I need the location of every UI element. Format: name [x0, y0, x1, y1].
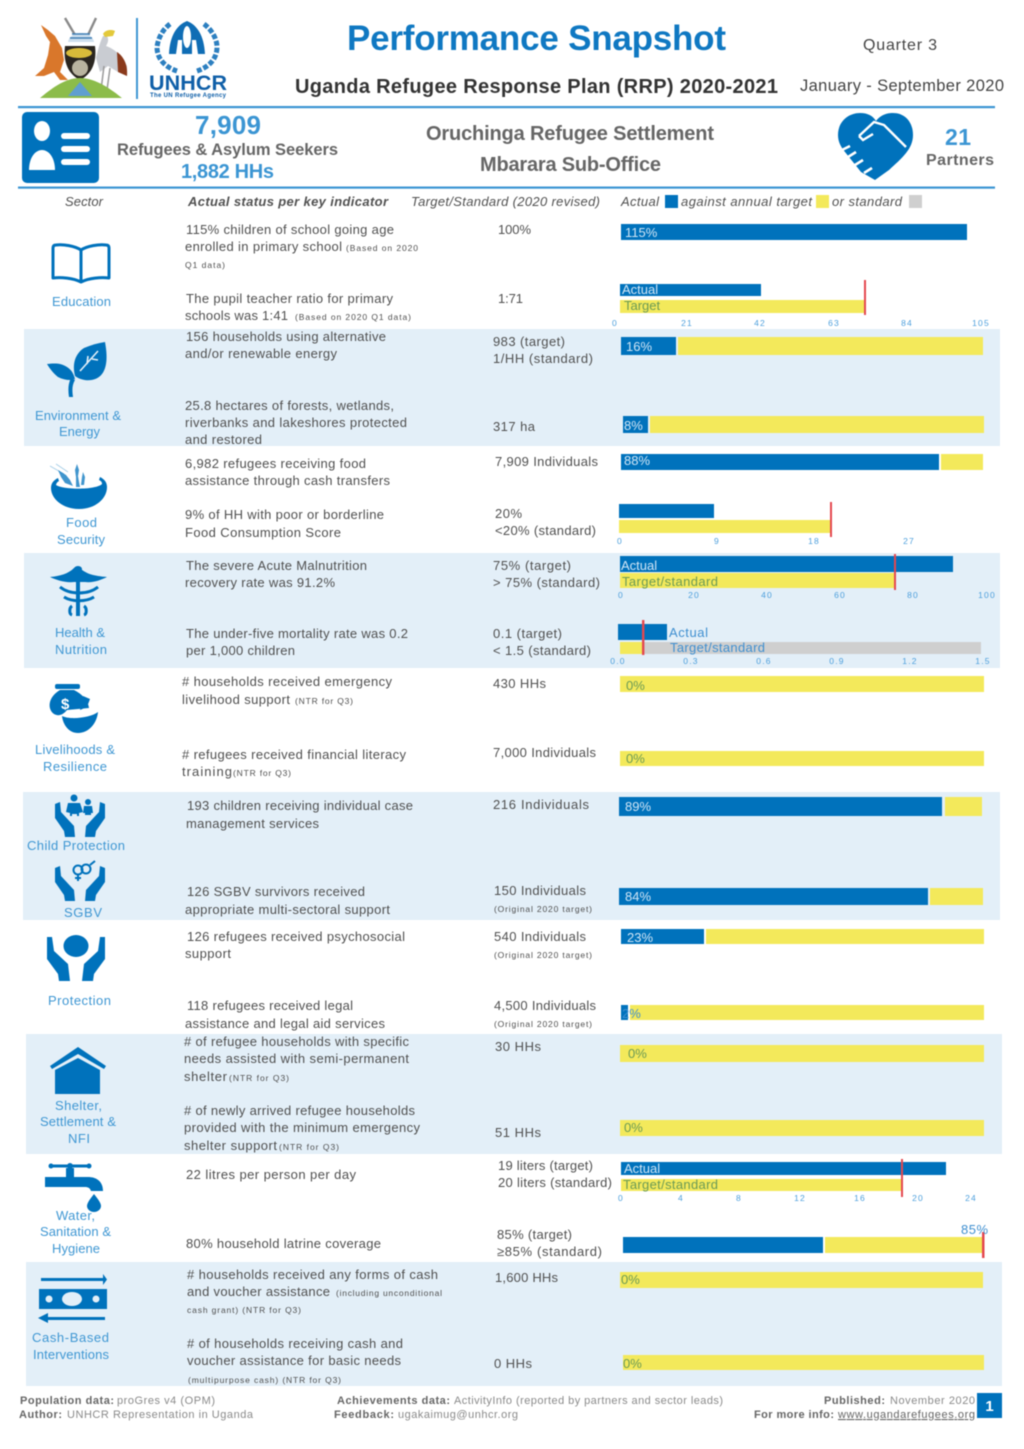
- indicator: litres per day: 4: [678, 1193, 684, 1203]
- indicator: under-five mortality: 0.1 (target): [493, 626, 562, 641]
- more info: [754, 1409, 975, 1421]
- indicator: latrine coverage: 85% (target): [497, 1227, 572, 1242]
- indicator: financial literacy: # refugees received financial literacy: [182, 747, 406, 762]
- sector label: NFI: [68, 1131, 90, 1146]
- indicator: emergency livelihood: 0%: [626, 678, 645, 693]
- indicator: food consumption score: 9: [714, 536, 720, 546]
- indicator: litres per day: 12: [794, 1193, 806, 1203]
- icon: money bag and bowl: $: [61, 696, 70, 713]
- logo: UNHCR: The UN Refugee Agency: [150, 93, 227, 99]
- population label: Refugees & Asylum Seekers: [117, 141, 338, 159]
- indicator: emergency livelihood: (NTR for Q3): [295, 696, 353, 706]
- panel: Livelihoods & Resilience: [35, 674, 984, 779]
- legend: against annual target: [681, 194, 813, 209]
- icon: caduceus: [50, 566, 107, 616]
- indicator: hectares protected: [185, 398, 984, 447]
- indicator: school enrolment: 100%: [498, 222, 531, 237]
- indicator: legal assistance: 2%: [622, 1006, 641, 1021]
- indicator: SAM recovery: Actual: [621, 558, 657, 573]
- indicator: SGBV survivors: [185, 883, 983, 917]
- achievements source: [337, 1395, 723, 1407]
- footer: [19, 1393, 1002, 1421]
- population figure: 7,909: [195, 110, 261, 140]
- indicator: semi-permanent shelter: 30 HHs: [495, 1039, 542, 1054]
- indicator: hectares protected: 8%: [624, 418, 643, 433]
- indicator: pupil teacher ratio: 84: [901, 318, 913, 328]
- sector label: Cash-Based: [32, 1330, 109, 1345]
- header rule top: [18, 106, 995, 108]
- indicator: pupil teacher ratio: schools was 1:41: [185, 308, 288, 323]
- panel: Environment & Energy: [24, 329, 1000, 447]
- indicator: child case management: 216 Individuals: [493, 797, 590, 812]
- sector label: [40, 1208, 111, 1256]
- indicator: pupil teacher ratio: 0: [612, 318, 618, 328]
- indicator: multipurpose cash: # of households receiving cash and: [187, 1336, 403, 1351]
- indicator: multipurpose cash: 0%: [623, 1356, 642, 1371]
- indicator: pupil teacher ratio: 105: [972, 318, 990, 328]
- indicator: cash and voucher: 0%: [621, 1272, 640, 1287]
- indicator: school enrolment: 115% children of school going age: [186, 222, 394, 237]
- households figure: 1,882 HHs: [181, 161, 274, 183]
- indicator: cash and voucher: (including unconditional: [336, 1288, 442, 1298]
- panel: Cash-Based Interventions: [26, 1262, 1002, 1386]
- indicator: emergency shelter: [184, 1103, 984, 1153]
- indicator: renewable energy: and/or renewable energy: [185, 346, 338, 361]
- indicator: food consumption score: <20% (standard): [495, 523, 596, 538]
- indicator: SGBV survivors: 84%: [625, 889, 651, 904]
- icon: hands with children: [55, 794, 105, 837]
- indicator: litres per day: 16: [854, 1193, 866, 1203]
- indicator: semi-permanent shelter: shelter: [184, 1069, 228, 1084]
- panel: Health & Nutrition: [24, 553, 1000, 668]
- indicator: multipurpose cash: voucher assistance for basic needs: [187, 1353, 402, 1368]
- indicator: emergency shelter: 51 HHs: [495, 1125, 542, 1140]
- header rule bottom: [18, 186, 995, 189]
- indicator: legal assistance: 4,500 Individuals: [494, 998, 596, 1013]
- indicator: pupil teacher ratio: 42: [754, 318, 766, 328]
- indicator: litres per day: 20: [912, 1193, 924, 1203]
- sector label: [32, 1330, 110, 1362]
- indicator: school enrolment: [185, 222, 967, 270]
- header: [35, 18, 1004, 99]
- page number: 1: [985, 1398, 994, 1415]
- indicator: SAM recovery: 20: [688, 590, 700, 600]
- indicator: semi-permanent shelter: needs assisted with semi-permanent: [184, 1051, 409, 1066]
- indicator: school enrolment: Q1 data): [185, 260, 225, 270]
- logo divider: [136, 18, 138, 99]
- sector label: Energy: [59, 424, 100, 439]
- indicator: litres per day: 20 liters (standard): [498, 1175, 612, 1190]
- icon: banknote with arrows: [38, 1274, 107, 1323]
- indicator: under-five mortality: 1.2: [902, 656, 918, 666]
- indicator: pupil teacher ratio: 21: [681, 318, 693, 328]
- indicator: food cash transfers: 7,909 Individuals: [495, 454, 598, 469]
- indicator: emergency livelihood: 430 HHs: [493, 676, 546, 691]
- sector label: Settlement &: [40, 1114, 116, 1129]
- legend: or standard: [832, 194, 903, 209]
- panel: Protection: [47, 929, 984, 1031]
- indicator: emergency livelihood: livelihood support: [182, 692, 290, 707]
- indicator: food consumption score: 20%: [495, 506, 522, 521]
- indicator: emergency shelter: 0%: [624, 1120, 643, 1135]
- indicator: litres per day: Target/standard: [623, 1177, 718, 1192]
- indicator: SGBV survivors: (Original 2020 target): [494, 904, 592, 914]
- indicator: litres per day: [186, 1158, 977, 1203]
- indicator: school enrolment: 115%: [625, 225, 658, 240]
- indicator: litres per day: 19 liters (target): [498, 1158, 593, 1173]
- indicator: school enrolment: enrolled in primary school: [185, 239, 342, 254]
- population source: Population data:: [20, 1395, 114, 1407]
- indicator: food consumption score: 9% of HH with poor or borderline: [185, 507, 384, 522]
- indicator: SAM recovery: 0: [618, 590, 624, 600]
- sector label: Child Protection: [27, 838, 125, 853]
- indicator: food consumption score: [185, 502, 915, 546]
- column: sector: Sector: [65, 194, 104, 209]
- indicator: food consumption score: 27: [903, 536, 915, 546]
- indicator: pupil teacher ratio: 63: [828, 318, 840, 328]
- published: November 2020: [890, 1395, 975, 1407]
- indicator: SAM recovery: 75% (target): [493, 558, 571, 573]
- indicator: financial literacy: training: [182, 764, 232, 779]
- indicator: multipurpose cash: 0 HHs: [494, 1356, 532, 1371]
- population source: [20, 1395, 215, 1407]
- panel: Water, Sanitation & Hygiene: [40, 1158, 988, 1259]
- sector label: Interventions: [33, 1347, 110, 1362]
- summary band: [22, 110, 994, 183]
- icon: book: [53, 245, 109, 282]
- indicator: pupil teacher ratio: Actual: [622, 282, 658, 297]
- indicator: semi-permanent shelter: (NTR for Q3): [229, 1073, 289, 1083]
- indicator: financial literacy: (NTR for Q3): [233, 768, 291, 778]
- legend: [620, 194, 922, 209]
- indicator: hectares protected: 317 ha: [493, 419, 536, 434]
- subtitle: Uganda Refugee Response Plan (RRP) 2020-2021: [295, 76, 778, 98]
- indicator: financial literacy: [182, 745, 984, 779]
- panel: Shelter, Settlement & NFI: [26, 1034, 1002, 1154]
- indicator: SAM recovery: 60: [834, 590, 846, 600]
- indicator: latrine coverage: [186, 1222, 988, 1259]
- indicator: psychosocial support: 23%: [627, 930, 653, 945]
- indicator: SGBV survivors: appropriate multi-sectoral support: [185, 902, 390, 917]
- achievements source: ActivityInfo (reported by partners and sector leads): [454, 1395, 723, 1407]
- icon: house: [50, 1047, 106, 1094]
- sector label: Sanitation &: [40, 1224, 111, 1239]
- sector label: Environment &: [35, 408, 121, 423]
- indicator: pupil teacher ratio: [185, 280, 990, 328]
- indicator: renewable energy: 16%: [626, 339, 652, 354]
- sector label: [40, 1098, 116, 1146]
- indicator: school enrolment: (Based on 2020: [346, 243, 418, 253]
- logo: UNHCR: [149, 21, 227, 99]
- indicator: pupil teacher ratio: The pupil teacher ratio for primary: [186, 291, 394, 306]
- author: Author:: [19, 1409, 62, 1421]
- indicator: litres per day: 0: [618, 1193, 624, 1203]
- indicator: SAM recovery: The severe Acute Malnutrition: [186, 558, 367, 573]
- indicator: multipurpose cash: [187, 1336, 984, 1385]
- indicator: latrine coverage: 80% household latrine coverage: [186, 1236, 381, 1251]
- more info: For more info:: [754, 1409, 834, 1421]
- icon: tap and drop: [45, 1163, 103, 1212]
- indicator: under-five mortality: The under-five mortality rate was 0.2: [186, 626, 408, 641]
- indicator: under-five mortality: Actual: [669, 625, 708, 640]
- indicator: cash and voucher: cash grant) (NTR for Q3): [187, 1305, 301, 1315]
- sector label: Food: [66, 515, 97, 530]
- indicator: food consumption score: Food Consumption Score: [185, 525, 341, 540]
- panel: Food Security: [50, 453, 983, 547]
- indicator: semi-permanent shelter: [184, 1034, 984, 1084]
- indicator: latrine coverage: 85%: [961, 1222, 988, 1237]
- indicator: emergency shelter: provided with the minimum emergency: [184, 1120, 420, 1135]
- sector label: SGBV: [64, 905, 102, 920]
- indicator: renewable energy: [185, 329, 983, 366]
- indicator: psychosocial support: (Original 2020 target): [494, 950, 592, 960]
- indicator: multipurpose cash: (multipurpose cash) (NTR for Q3): [188, 1375, 341, 1385]
- sector label: Livelihoods &: [35, 742, 115, 757]
- indicator: SAM recovery: 80: [907, 590, 919, 600]
- indicator: SAM recovery: Target/standard: [622, 574, 718, 589]
- population source: proGres v4 (OPM): [117, 1395, 215, 1407]
- icon: person card: [22, 112, 99, 183]
- indicator: under-five mortality: 0.6: [756, 656, 772, 666]
- indicator: SAM recovery: > 75% (standard): [493, 575, 600, 590]
- indicator: legal assistance: 118 refugees received legal: [187, 998, 353, 1013]
- indicator: under-five mortality: < 1.5 (standard): [493, 643, 591, 658]
- more info: www.ugandarefugees.org: [837, 1409, 975, 1421]
- indicator: emergency livelihood: [182, 674, 984, 707]
- indicator: emergency livelihood: # households received emergency: [182, 674, 392, 689]
- indicator: SGBV survivors: 126 SGBV survivors received: [187, 884, 365, 899]
- published: Published:: [824, 1395, 885, 1407]
- panel: Child Protection and SGBV: [23, 792, 1000, 920]
- feedback: [334, 1409, 518, 1421]
- icon: handshake heart: [838, 113, 913, 180]
- icon: hands with gender symbols: [55, 861, 105, 901]
- indicator: under-five mortality: 0.3: [683, 656, 699, 666]
- indicator: renewable energy: 983 (target): [493, 334, 565, 349]
- indicator: cash and voucher: 1,600 HHs: [495, 1270, 558, 1285]
- feedback: ugakaimug@unhcr.org: [398, 1409, 518, 1421]
- quarter: Quarter 3: [863, 37, 937, 54]
- indicator: child case management: management services: [186, 816, 320, 831]
- sector label: Shelter,: [55, 1098, 102, 1113]
- indicator: child case management: [186, 797, 982, 831]
- indicator: pupil teacher ratio: Target: [624, 298, 661, 313]
- indicator: SGBV survivors: 150 Individuals: [494, 883, 586, 898]
- icon: hands holding person: [47, 935, 105, 981]
- icon: leaf plant: [47, 342, 107, 397]
- indicator: semi-permanent shelter: # of refugee households with specific: [184, 1034, 410, 1049]
- indicator: renewable energy: 156 households using alternative: [186, 329, 386, 344]
- sector label: Hygiene: [52, 1241, 100, 1256]
- indicator: food cash transfers: [185, 453, 983, 488]
- indicator: food consumption score: 18: [808, 536, 820, 546]
- indicator: emergency shelter: (NTR for Q3): [279, 1142, 339, 1152]
- indicator: financial literacy: 0%: [626, 751, 645, 766]
- indicator: cash and voucher: # households received any forms of cash: [187, 1267, 438, 1282]
- achievements source: Achievements data:: [337, 1395, 450, 1407]
- indicator: pupil teacher ratio: (Based on 2020 Q1 data): [295, 312, 411, 322]
- sector label: Protection: [48, 993, 111, 1008]
- indicator: food cash transfers: 6,982 refugees receiving food: [185, 456, 366, 471]
- indicator: under-five mortality: 0.0: [610, 656, 626, 666]
- indicator: litres per day: 22 litres per person per day: [186, 1167, 356, 1182]
- partners figure: 21: [945, 124, 971, 150]
- indicator: child case management: 193 children receiving individual case: [187, 798, 413, 813]
- indicator: food cash transfers: assistance through cash transfers: [185, 473, 390, 488]
- indicator: legal assistance: assistance and legal aid services: [185, 1016, 386, 1031]
- sector label: [57, 515, 106, 547]
- logo: UNHCR: UNHCR: [149, 71, 227, 95]
- column: actual status: Actual status per key indicator: [187, 194, 389, 209]
- indicator: under-five mortality: [186, 620, 991, 666]
- indicator: SAM recovery: [185, 554, 996, 600]
- icon: money bag and bowl: [50, 684, 98, 733]
- indicator: SAM recovery: 100: [978, 590, 996, 600]
- indicator: under-five mortality: per 1,000 children: [186, 643, 295, 658]
- indicator: hectares protected: 25.8 hectares of forests, wetlands,: [185, 398, 394, 413]
- indicator: psychosocial support: 540 Individuals: [494, 929, 586, 944]
- sector label: [35, 408, 121, 439]
- feedback: Feedback:: [334, 1409, 394, 1421]
- indicator: hectares protected: and restored: [185, 432, 262, 447]
- indicator: psychosocial support: support: [185, 946, 231, 961]
- indicator: psychosocial support: [185, 929, 984, 961]
- indicator: SAM recovery: recovery rate was 91.2%: [185, 575, 335, 590]
- indicator: latrine coverage: ≥85% (standard): [497, 1244, 602, 1259]
- author: UNHCR Representation in Uganda: [67, 1409, 254, 1421]
- sector label: Resilience: [43, 759, 107, 774]
- panel: Education: [52, 222, 990, 328]
- period: January - September 2020: [800, 77, 1004, 95]
- indicator: cash and voucher: and voucher assistance: [187, 1284, 330, 1299]
- indicator: emergency shelter: shelter support: [184, 1138, 277, 1153]
- indicator: child case management: 89%: [625, 799, 651, 814]
- indicator: food consumption score: 0: [617, 536, 623, 546]
- indicator: legal assistance: [185, 998, 984, 1031]
- indicator: under-five mortality: 1.5: [975, 656, 991, 666]
- icon: food bowl: [50, 464, 107, 509]
- indicator: litres per day: 8: [736, 1193, 742, 1203]
- indicator: litres per day: Actual: [624, 1161, 660, 1176]
- title: Performance Snapshot: [347, 19, 726, 58]
- sector label: [55, 625, 107, 657]
- sub-office name: Mbarara Sub-Office: [480, 154, 661, 176]
- indicator: under-five mortality: 0.9: [829, 656, 845, 666]
- sector label: [35, 742, 115, 774]
- indicator: litres per day: 24: [965, 1193, 977, 1203]
- indicator: renewable energy: 1/HH (standard): [493, 351, 593, 366]
- sector label: Health &: [55, 625, 105, 640]
- page number: [977, 1393, 1002, 1418]
- sector label: Nutrition: [55, 642, 107, 657]
- indicator: food cash transfers: 88%: [624, 453, 650, 468]
- partners label: Partners: [926, 152, 994, 169]
- logo: Uganda coat of arms: [35, 18, 127, 98]
- legend: Actual: [620, 194, 660, 209]
- indicator: SAM recovery: 40: [761, 590, 773, 600]
- indicator: hectares protected: riverbanks and lakeshores protected: [185, 415, 407, 430]
- indicator: psychosocial support: 126 refugees received psychosocial: [187, 929, 405, 944]
- column: target: Target/Standard (2020 revised): [411, 194, 600, 209]
- indicator: under-five mortality: Target/standard: [670, 640, 765, 655]
- sector label: Education: [52, 294, 111, 309]
- indicator: semi-permanent shelter: 0%: [628, 1046, 647, 1061]
- settlement name: Oruchinga Refugee Settlement: [426, 123, 714, 145]
- sector label: Security: [57, 532, 106, 547]
- table column headers: [65, 194, 922, 209]
- sector label: Water,: [56, 1208, 95, 1223]
- indicator: emergency shelter: # of newly arrived refugee households: [184, 1103, 416, 1118]
- published: [824, 1395, 975, 1407]
- indicator: legal assistance: (Original 2020 target): [494, 1019, 592, 1029]
- indicator: pupil teacher ratio: 1:71: [498, 291, 523, 306]
- indicator: cash and voucher: [187, 1267, 983, 1315]
- indicator: financial literacy: 7,000 Individuals: [493, 745, 596, 760]
